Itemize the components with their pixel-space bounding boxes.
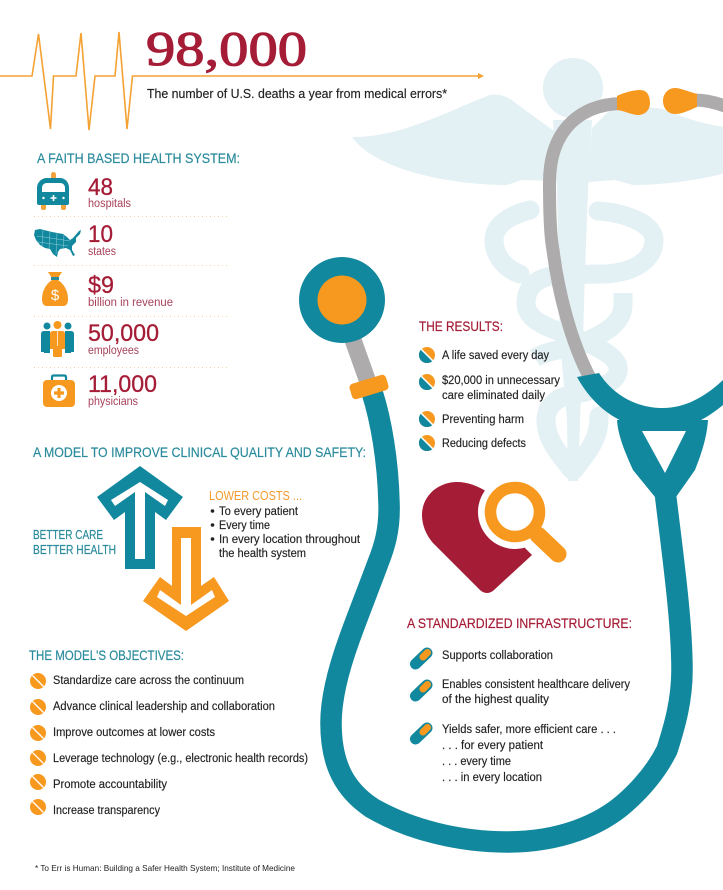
arrow: up: [97, 466, 183, 569]
icon: US map: [34, 229, 81, 257]
item 3: . . . in every location: [442, 772, 542, 784]
result 4: Reducing defects: [442, 438, 526, 450]
lower costs text: In every location throughout: [219, 534, 361, 546]
lower costs text: To every patient: [219, 506, 299, 518]
objective 5: Promote accountability: [53, 779, 167, 791]
item 1: [416, 650, 553, 664]
stat: revenue: [42, 272, 173, 309]
result 1: [419, 347, 549, 363]
stat: states: [34, 221, 116, 258]
right ear tip: [663, 88, 697, 114]
objective 4: Leverage technology (e.g., electronic health records): [53, 753, 308, 765]
objective 6: Increase transparency: [53, 805, 160, 817]
icon: ambulance: [37, 172, 69, 210]
number: 50,000: [88, 320, 159, 347]
gray ear tube right: [695, 100, 723, 108]
lower costs text: LOWER COSTS ...: [209, 489, 302, 503]
icon: money bag: $: [51, 287, 60, 304]
objective 3: [30, 725, 215, 741]
result 4: [419, 435, 526, 451]
result 3: Preventing harm: [442, 414, 524, 426]
label: hospitals: [88, 198, 131, 210]
teal y-piece: [617, 420, 708, 497]
result 3: [419, 411, 524, 427]
objective 2: Advance clinical leadership and collaboration: [53, 701, 275, 713]
item 2: [416, 679, 630, 706]
result 2: $20,000 in unnecessary: [442, 375, 560, 387]
title number: 98,000: [146, 21, 307, 76]
stat: physicians: [43, 371, 157, 408]
arrow: down: [143, 527, 229, 631]
label: better care: [33, 528, 116, 557]
item 3: . . . for every patient: [442, 740, 544, 752]
icon: medical kit: [43, 376, 75, 407]
item 3: . . . every time: [442, 756, 511, 768]
objectives list: [30, 673, 308, 817]
label: billion in revenue: [88, 297, 173, 309]
lower costs text: the health system: [219, 548, 306, 560]
heading: infrastructure: A STANDARDIZED INFRASTRUCTURE:: [407, 615, 632, 631]
lower costs text: [209, 489, 361, 560]
stethoscope: [299, 88, 723, 842]
objective 1: Standardize care across the continuum: [53, 675, 244, 687]
infrastructure list: [416, 650, 630, 784]
heading: model: A MODEL TO IMPROVE CLINICAL QUALITY AND SAFETY:: [33, 444, 366, 460]
lower costs text: Every time: [219, 520, 270, 532]
number: $9: [88, 272, 114, 299]
orange collar: [348, 374, 390, 400]
left ear tip: [617, 90, 650, 115]
number: 48: [88, 174, 113, 201]
objective 6: [30, 799, 160, 817]
gray stem: [353, 340, 368, 382]
item 3: Yields safer, more efficient care . . .: [442, 724, 616, 736]
ECG line with arrow: [0, 32, 484, 130]
number: 10: [88, 221, 113, 248]
gray ear tube left: [550, 104, 620, 378]
subtitle: The number of U.S. deaths a year from medical errors*: [147, 87, 447, 101]
footnote: * To Err is Human: Building a Safer Health System; Institute of Medicine: [35, 863, 295, 873]
objective 4: [30, 750, 308, 766]
label: employees: [88, 345, 139, 357]
chest piece: [299, 257, 385, 343]
stat: employees: [41, 320, 159, 357]
heading: health system: A FAITH BASED HEALTH SYSTEM:: [37, 150, 240, 166]
result 2: care eliminated daily: [442, 390, 545, 402]
label: better care: BETTER HEALTH: [33, 543, 116, 557]
results list: [419, 347, 560, 451]
main teal tube: [331, 392, 682, 842]
objective 5: [30, 774, 167, 791]
heading: objectives: THE MODEL'S OBJECTIVES:: [29, 647, 184, 663]
objective 1: [30, 673, 244, 689]
item 1: Supports collaboration: [442, 650, 553, 662]
number: 11,000: [88, 371, 157, 398]
label: better care: BETTER CARE: [33, 528, 103, 542]
objective 3: Improve outcomes at lower costs: [53, 727, 215, 739]
label: physicians: [88, 396, 138, 408]
divider dots: [34, 216, 228, 368]
icon: people: [41, 321, 74, 357]
item 2: Enables consistent healthcare delivery: [442, 679, 630, 691]
label: states: [88, 246, 116, 258]
item 2: of the highest quality: [442, 694, 549, 706]
icon: heart with magnifier: [422, 475, 558, 593]
result 1: A life saved every day: [442, 350, 549, 362]
caduceus watermark: [352, 58, 723, 481]
heading: results: THE RESULTS:: [419, 318, 503, 334]
teal yoke arc: [577, 373, 723, 430]
objective 2: [30, 699, 275, 715]
result 2: [419, 374, 560, 402]
stat: hospitals: [37, 172, 131, 210]
item 3: [416, 724, 616, 784]
